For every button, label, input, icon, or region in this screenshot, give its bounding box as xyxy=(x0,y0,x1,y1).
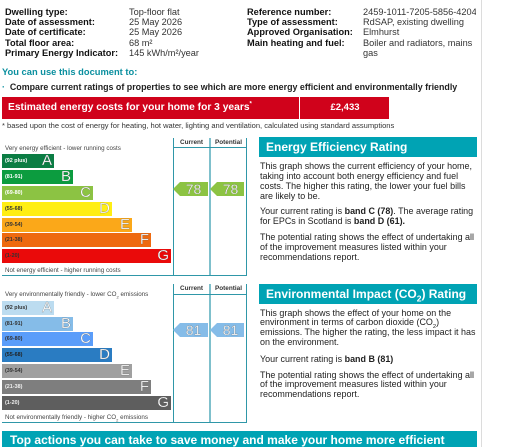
band G xyxy=(2,249,171,263)
subheading: you can use this document: You can use this document to: xyxy=(2,67,137,77)
band C xyxy=(2,186,93,200)
band C: C xyxy=(80,330,91,347)
band A xyxy=(2,154,54,168)
environmental rating text xyxy=(260,308,476,399)
bullet: compare ratings: · Compare current ratings of properties to see which are more energy efficient and environmentally friendly xyxy=(2,82,457,92)
cost footnote: * based upon the cost of energy for heating, hot water, lighting and ventilation, calculated using standard assumptions xyxy=(2,121,394,130)
band G: (1-20) xyxy=(5,400,19,406)
band A: (92 plus) xyxy=(5,158,27,164)
potential rating arrow 78 xyxy=(210,181,244,197)
property details: right column: Elmhurst xyxy=(363,27,399,37)
property details: right column: RdSAP, existing dwelling xyxy=(363,17,464,27)
potential rating arrow 81: 81 xyxy=(223,322,238,338)
property details: right column: Reference number: xyxy=(247,7,331,17)
current rating arrow 81 xyxy=(173,322,208,338)
property details: right column: Approved Organisation: xyxy=(247,27,353,37)
property details: left column: Date of assessment: xyxy=(5,17,95,27)
band C: (69-80) xyxy=(5,336,22,342)
environmental rating text: emissions. The higher the rating, the less impact it has xyxy=(260,327,475,337)
environmental rating text: of the improvement measures listed within your xyxy=(260,379,447,389)
property details: right column: Boiler and radiators, mains xyxy=(363,38,472,48)
energy rating text: This graph shows the current efficiency of your home, xyxy=(260,161,472,171)
band A: A xyxy=(42,152,52,169)
band E: (39-54) xyxy=(5,368,22,374)
band F xyxy=(2,380,151,394)
potential rating arrow 81 xyxy=(210,322,244,338)
energy rating text: The potential rating shows the effect of undertaking all xyxy=(260,232,474,242)
energy rating text: costs. The higher this rating, the lower your fuel bills xyxy=(260,181,466,191)
energy rating text: Your current rating is band C (78). The average rating xyxy=(260,206,473,216)
band B: (81-91) xyxy=(5,320,22,326)
property details: left column xyxy=(5,7,199,58)
band B: B xyxy=(61,168,71,185)
band B: (81-91) xyxy=(5,174,22,180)
property details: left column: Primary Energy Indicator: xyxy=(5,48,118,58)
top scale label: Very energy efficient - lower running costs xyxy=(5,145,121,152)
band E: E xyxy=(120,216,130,233)
property details: right column: gas xyxy=(363,48,378,58)
property details: right column: Main heating and fuel: xyxy=(247,38,345,48)
band D: (55-68) xyxy=(5,352,22,358)
page edge divider xyxy=(481,0,482,447)
cost label: Estimated energy costs for your home for 3 years* xyxy=(8,102,252,113)
property details: left column: Dwelling type: xyxy=(5,7,68,17)
band G xyxy=(2,396,171,410)
band C xyxy=(2,332,93,346)
heading: energy efficiency rating: Energy Efficiency Rating xyxy=(266,140,407,154)
band F xyxy=(2,233,151,247)
band A: (92 plus) xyxy=(5,304,27,310)
bottom scale label: Not energy efficient - higher running costs xyxy=(5,267,121,274)
column header: current: Current xyxy=(180,139,203,146)
property details: right column: 2459-1011-7205-5856-4204 xyxy=(363,7,476,17)
environmental rating text: Your current rating is band B (81) xyxy=(260,354,393,364)
energy cost banner xyxy=(2,97,389,119)
bottom scale label: Not environmentally friendly - higher CO2 emissions xyxy=(5,414,148,422)
band B xyxy=(2,317,73,331)
column header: current: Current xyxy=(180,285,203,292)
band D xyxy=(2,202,112,216)
environmental rating text: The potential rating shows the effect of undertaking all xyxy=(260,370,474,380)
column header: potential: Potential xyxy=(215,139,242,146)
band E: (39-54) xyxy=(5,222,22,228)
band A: A xyxy=(42,299,52,316)
banner: top actions: Top actions you can take to save money and make your home more efficient xyxy=(10,433,445,447)
band F: (21-38) xyxy=(5,384,22,390)
potential rating arrow 78: 78 xyxy=(223,181,238,197)
band F: F xyxy=(140,231,149,248)
band E: E xyxy=(120,362,130,379)
band E xyxy=(2,218,132,232)
property details: left column: Top-floor flat xyxy=(129,7,180,17)
environmental impact chart xyxy=(2,284,247,423)
band D: (55-68) xyxy=(5,206,22,212)
property details: left column: 68 m² xyxy=(129,38,152,48)
band D: D xyxy=(99,200,110,217)
band E xyxy=(2,364,132,378)
energy rating text: taking into account both energy efficiency and fuel xyxy=(260,171,458,181)
environmental rating text: recommendations report. xyxy=(260,389,359,399)
band A xyxy=(2,301,54,315)
property details: left column: Date of certificate: xyxy=(5,27,86,37)
property details: left column: 25 May 2026 xyxy=(129,17,182,27)
property details: right column: Type of assessment: xyxy=(247,17,338,27)
chart frame xyxy=(2,138,247,276)
energy rating text: recommendations report. xyxy=(260,252,359,262)
cost value xyxy=(299,97,390,119)
heading: environmental impact rating: Environmental Impact (CO2) Rating xyxy=(266,287,466,303)
energy efficiency chart xyxy=(2,138,247,276)
energy rating text: are likely to be. xyxy=(260,191,320,201)
band F: (21-38) xyxy=(5,236,22,242)
column header: potential: Potential xyxy=(215,285,242,292)
energy rating text xyxy=(260,161,474,262)
band F: F xyxy=(140,378,149,395)
band C: (69-80) xyxy=(5,190,22,196)
cost value: £2,433 xyxy=(330,102,360,113)
heading: energy efficiency rating xyxy=(259,137,477,157)
band B xyxy=(2,170,73,184)
property details: right column xyxy=(247,7,476,58)
environmental rating text: environment in terms of carbon dioxide (CO2) xyxy=(260,317,439,330)
property details: left column: 25 May 2026 xyxy=(129,27,182,37)
band G: G xyxy=(157,247,169,264)
band D: D xyxy=(99,346,110,363)
band G: G xyxy=(157,394,169,411)
property details: left column: 145 kWh/m²/year xyxy=(129,48,199,58)
property details: left column: Total floor area: xyxy=(5,38,74,48)
chart frame xyxy=(2,284,247,423)
energy rating text: for EPCs in Scotland is band D (61). xyxy=(260,216,405,226)
environmental rating text: on the environment. xyxy=(260,337,339,347)
top scale label: Very environmentally friendly - lower CO2 emissions xyxy=(5,291,148,299)
band G: (1-20) xyxy=(5,252,19,258)
band C: C xyxy=(80,184,91,201)
environmental rating text: This graph shows the effect of your home on the xyxy=(260,308,451,318)
current rating arrow 78: 78 xyxy=(186,181,201,197)
energy rating text: of the improvement measures listed within your xyxy=(260,242,447,252)
current rating arrow 81: 81 xyxy=(186,322,201,338)
current rating arrow 78 xyxy=(173,181,208,197)
band D xyxy=(2,348,112,362)
band B: B xyxy=(61,315,71,332)
